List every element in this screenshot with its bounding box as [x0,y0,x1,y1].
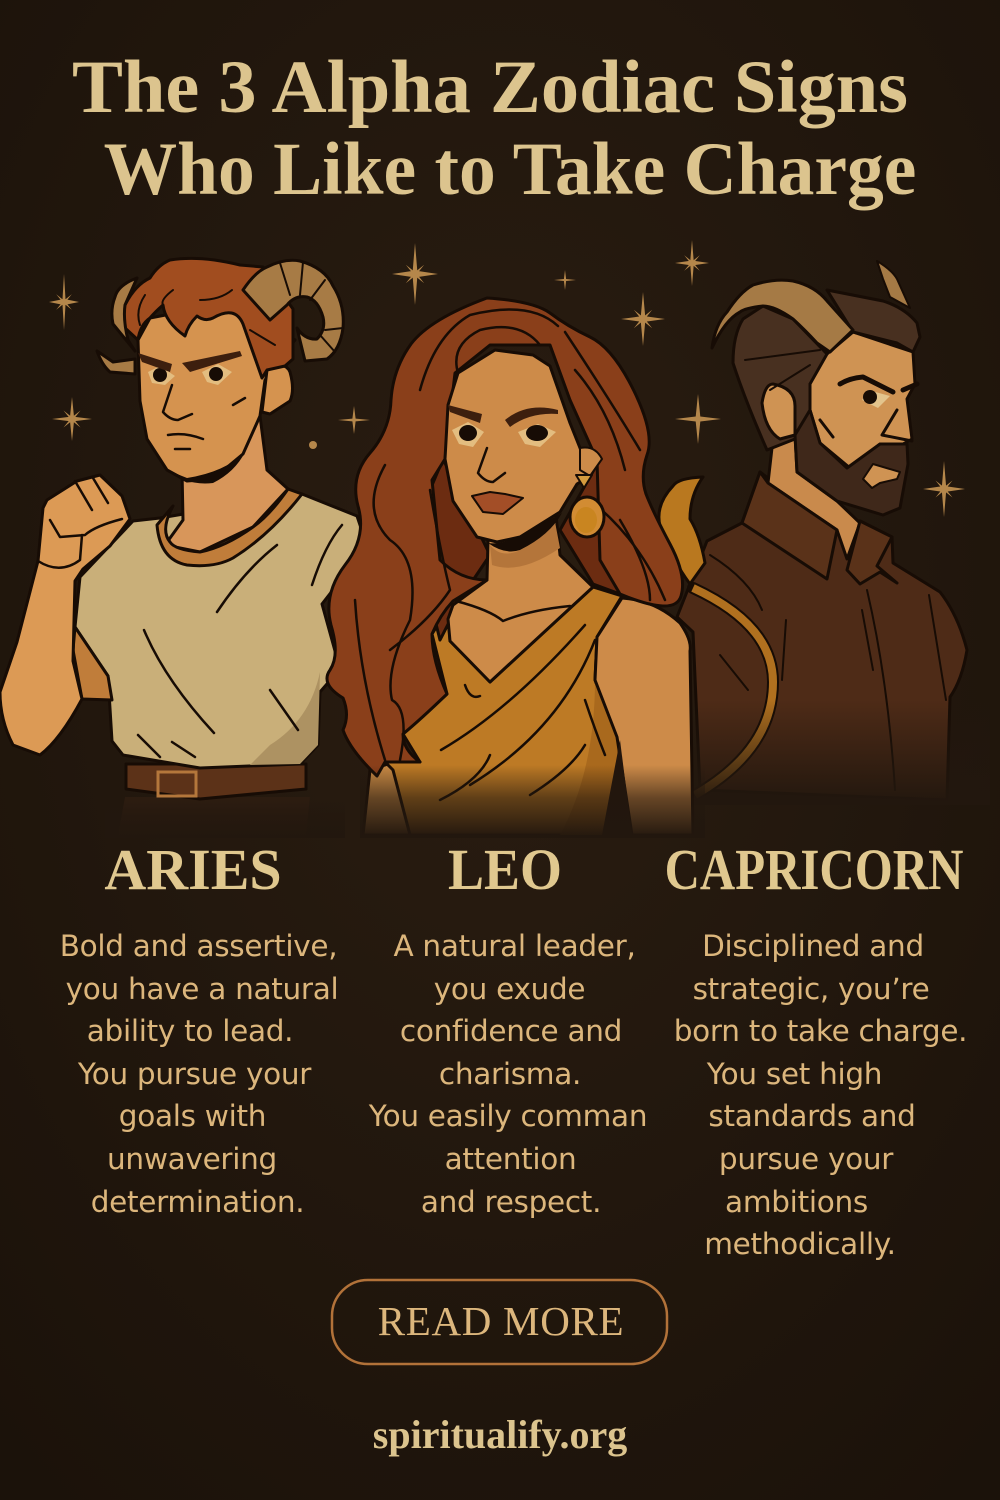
stars [48,240,965,517]
text: Aries description: Bold and assertive, [60,929,337,963]
title line 1: The 3 Alpha Zodiac Signs [72,46,908,129]
text: Aries description: unwavering [107,1142,277,1176]
character: Aries man [0,258,367,835]
character: Leo woman [105,298,705,838]
text: Capricorn description: ambitions [725,1185,868,1219]
text: Capricorn description [674,929,967,1261]
text: Capricorn description: standards and [708,1099,916,1133]
text: Aries description [60,929,338,1219]
text: Aries description: determination. [91,1185,304,1219]
heading: Capricorn: CAPRICORN [665,837,963,902]
button label: READ MORE [378,1298,624,1344]
heading: Aries: ARIES [104,837,282,902]
text: Aries description: you have a natural [66,972,338,1006]
text: Capricorn description: Disciplined and [702,929,924,963]
footer: website: spiritualify.org [373,1412,627,1457]
button: read more [332,1280,667,1364]
text: Leo description: you exude [434,972,585,1006]
title line 2: Who Like to Take Charge [104,128,916,211]
text: Leo description: confidence and [400,1014,622,1048]
heading: Leo: LEO [448,837,562,902]
text: Capricorn description: methodically. [704,1227,896,1261]
text: Leo description [368,929,647,1219]
character: Capricorn man [659,261,990,805]
text: Leo description: and respect. [421,1185,601,1219]
text: Leo description: attention [445,1142,576,1176]
text: Aries description: You pursue your [78,1057,311,1091]
text: Aries description: goals with [119,1099,266,1133]
text: Capricorn description: pursue your [719,1142,893,1176]
text: Leo description: You easily comman [369,1099,647,1133]
text: Capricorn description: born to take charge. [674,1014,967,1048]
text: Capricorn description: strategic, you’re [693,972,929,1006]
text: Leo description: A natural leader, [393,929,636,963]
text: Aries description: ability to lead. [87,1014,293,1048]
text: Capricorn description: You set high [707,1057,882,1091]
text: Leo description: charisma. [439,1057,581,1091]
